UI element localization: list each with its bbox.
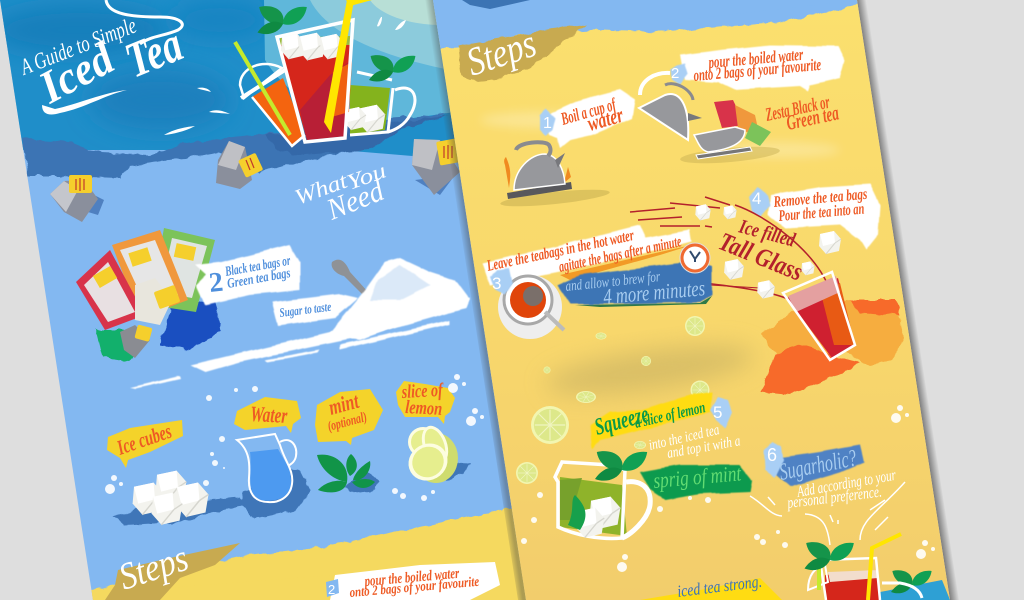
illustration: ice cubes (112, 471, 245, 525)
background: cream yellow field (430, 0, 955, 600)
callout: water (234, 397, 301, 433)
text: add according (786, 467, 898, 512)
callout: slice of lemon: lemon (405, 397, 443, 420)
callout: step 2 bottom (326, 562, 500, 600)
background: blue top (425, 0, 870, 50)
step 5: yellow brush: a slice of lemon (633, 399, 707, 432)
step 1: bubble (540, 90, 635, 148)
motion swooshes (630, 197, 830, 300)
illustration: tall glass (783, 272, 855, 360)
illustration: water pitcher (237, 434, 310, 518)
step 2: bubble: 2 (671, 65, 679, 82)
text: Zesta Black or Green tea: Zesta Black or (763, 92, 832, 126)
step 5: yellow brush: 5 (713, 403, 722, 422)
step 6: sugarholic (764, 442, 864, 487)
step 4: bubble (749, 184, 880, 250)
callout: water: Water (250, 401, 288, 428)
step 4: bubble: Pour the tea into an (777, 201, 865, 225)
spoon (332, 260, 366, 294)
background: watercolour blue header (0, 0, 460, 160)
callout: sprig of mint (640, 460, 752, 500)
icon: tea bag centre (216, 141, 263, 189)
text: into the iced tea: and top it with a (666, 433, 742, 462)
tall glass (280, 40, 352, 140)
steps brush (458, 24, 586, 82)
heading: Steps: Steps (461, 20, 541, 85)
step 3: bubble (482, 225, 692, 286)
step 4: bubble: 4 (752, 189, 761, 208)
heading: What You Need (294, 167, 386, 220)
text: Ice filled Tall Glass (715, 215, 807, 287)
text: into the iced tea: into the iced tea (647, 422, 721, 454)
callout: mint: (optional) (326, 410, 369, 435)
step 1: bubble: 1 (543, 115, 552, 132)
title: Tea (117, 15, 190, 88)
text: Zesta Black or Green tea: Green tea (784, 100, 841, 135)
heading: Steps: Steps (114, 537, 193, 599)
illustration: mint leaves (317, 454, 378, 494)
bottom yellow brush (88, 505, 526, 600)
text: Zesta Black or Green tea (763, 92, 841, 135)
panel: left poster (0, 0, 530, 600)
ice cubes flying (695, 204, 841, 299)
illustration: lemon (408, 426, 471, 483)
callout: sugar to taste: Sugar to taste (279, 299, 332, 320)
step 1: bubble: water (584, 102, 626, 136)
step 5: yellow brush (590, 392, 732, 450)
illustration: bottom glass (804, 534, 932, 600)
text: add according: personal preference. (786, 484, 883, 512)
callout: sprig of mint: sprig of mint (652, 460, 743, 493)
step 3: bubble: Leave the teabags in the hot water (485, 227, 636, 275)
callout: step 2 bottom: pour the boiled water (363, 566, 460, 590)
steps brush (105, 543, 240, 600)
shadow of right panel (857, 0, 959, 600)
step 4: bubble: Remove the tea bags (772, 186, 868, 211)
sugar pile (328, 258, 470, 340)
splash marks (164, 17, 406, 135)
olive wash (543, 336, 757, 404)
lemons scattered (516, 316, 710, 484)
step 2: bubble: pour the boiled water (706, 45, 804, 72)
step 3: blue banner (557, 263, 712, 309)
soft wash (480, 112, 840, 158)
text: into the iced tea (647, 422, 742, 462)
background: dark blue brush band (22, 113, 448, 178)
text: add according: Add according to your (795, 467, 898, 501)
shadow on left panel (425, 0, 526, 600)
step 2: bubble (640, 45, 845, 95)
dark brush remnant (462, 0, 530, 9)
icon: clock (680, 243, 710, 273)
callout: sugar to taste (272, 294, 358, 326)
callout: ice cubes: Ice cubes (113, 419, 175, 460)
heading: What You Need: What (291, 167, 351, 210)
step 1: kettle on fire (500, 142, 610, 210)
text: Ice filled Tall Glass: Tall Glass (715, 227, 807, 287)
icon: tea bag right (412, 138, 460, 195)
heading: What You Need: You (343, 158, 389, 195)
splash: orange under glass (760, 300, 905, 395)
callout: 2 black or green tea bags: Black tea bags or (223, 254, 292, 280)
bubbles (105, 374, 484, 501)
callout: 2 black or green tea bags (195, 245, 300, 305)
shadow (265, 115, 450, 155)
step 3: tea cup: 3 (492, 274, 501, 293)
step 1: bubble: Boil a cup of (558, 94, 619, 129)
title (15, 0, 190, 114)
bubbles (521, 405, 935, 572)
step 3: tea cup (490, 268, 564, 339)
drinks group (235, 0, 450, 155)
step 2: bubble: onto 2 bags of your favourite (693, 55, 822, 85)
panel: right poster (425, 0, 955, 600)
callout: mint (315, 388, 383, 445)
illustration: green mug (555, 451, 650, 538)
blue top fill (425, 0, 860, 40)
step 3: blue banner: and allow to brew for (565, 269, 661, 295)
icon: tea bag left (50, 175, 104, 222)
heading: What You Need: Need (321, 174, 389, 227)
callout: slice of lemon: slice of (400, 380, 444, 403)
callout: step 2 bottom: 2 (328, 582, 335, 597)
step 6: sugarholic: 6 (767, 445, 777, 465)
green mug (350, 85, 390, 135)
orange cup (252, 78, 305, 146)
callout: slice of lemon (396, 380, 455, 424)
callout: 2 black or green tea bags: Green tea bags (226, 266, 292, 292)
callout: 2 black or green tea bags: 2 (207, 267, 225, 299)
step 2: cup and packets (680, 100, 780, 166)
step 2: tilted kettle (639, 84, 702, 140)
bottom banner (640, 572, 782, 600)
background: sky blue field (0, 0, 530, 600)
title: Iced (30, 32, 123, 113)
bottom blue brush (880, 580, 950, 600)
decorative swish lines (750, 482, 905, 545)
step 3: blue banner: 4 more minutes (602, 275, 706, 309)
tea packets with splashes (76, 228, 222, 362)
step 6: sugarholic: Sugarholic? (777, 445, 859, 486)
text: Ice filled Tall Glass: Ice filled (736, 215, 798, 252)
callout: ice cubes (107, 419, 183, 468)
step 5: yellow brush: Squeeze (592, 401, 652, 441)
sugar strokes (130, 298, 470, 389)
callout: mint: mint (326, 388, 362, 420)
step 3: bubble: agitate the bags after a minute (557, 233, 683, 276)
